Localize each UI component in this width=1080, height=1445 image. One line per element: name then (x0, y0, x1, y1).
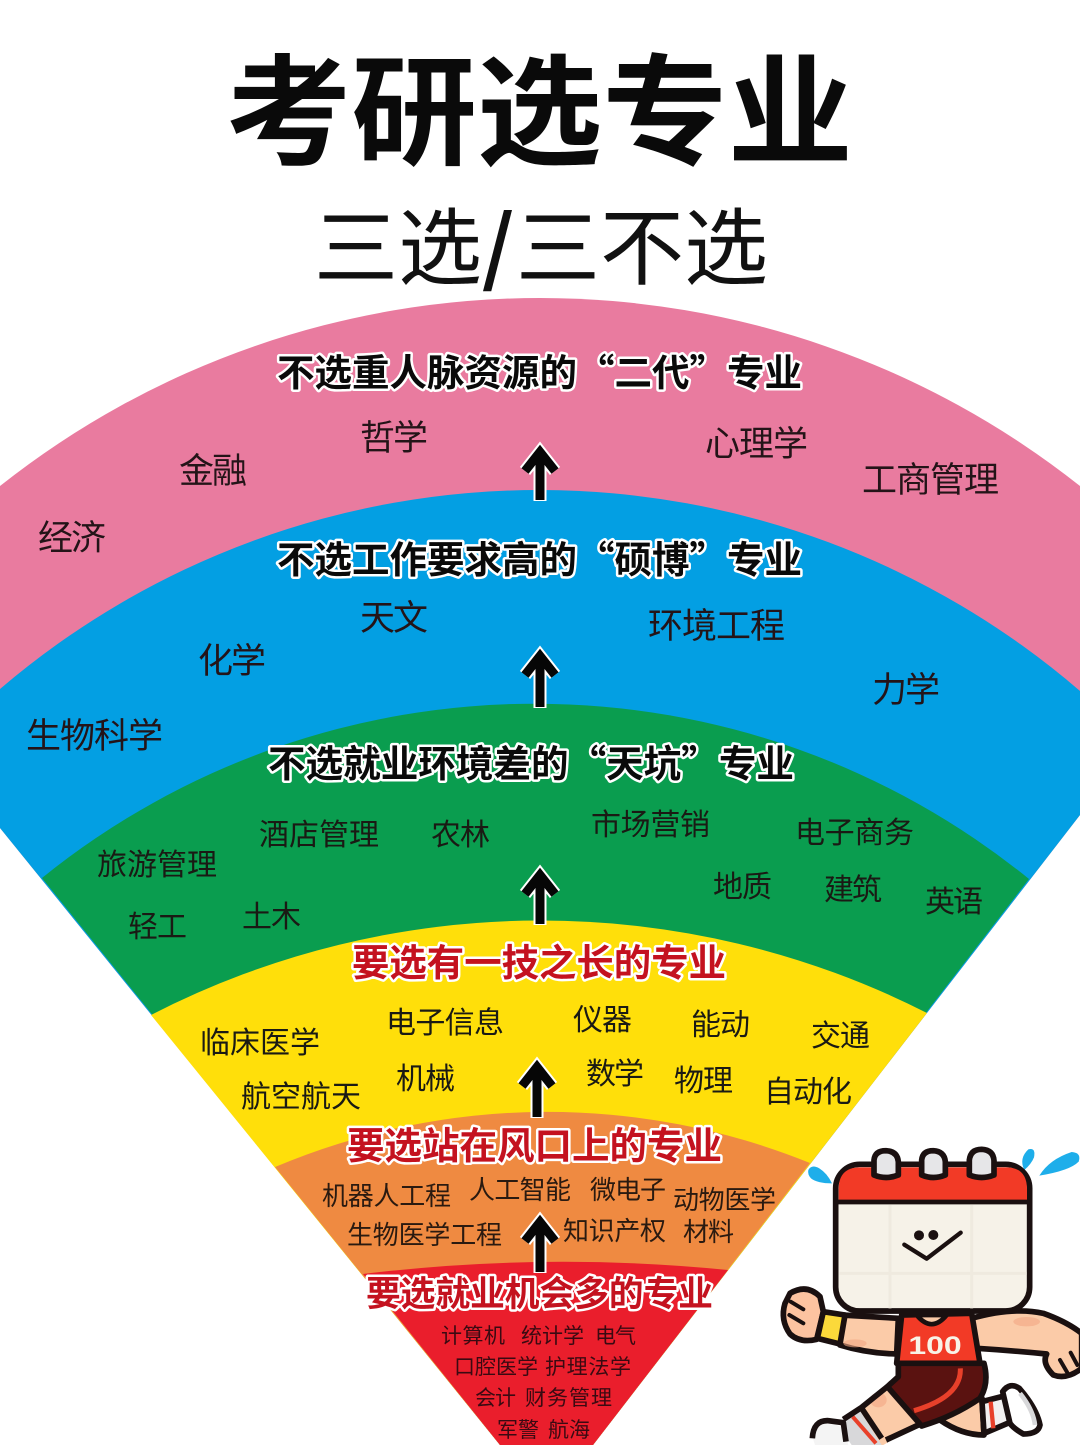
icon: smiling face (904, 1230, 961, 1259)
chart: major selection fan (0, 298, 1080, 1445)
majors: orange tier: 知识产权 (563, 1216, 666, 1246)
majors: pink tier: 哲学 (360, 419, 428, 458)
icon: front leg and shoe (812, 1387, 918, 1445)
icon: back leg and shoe (940, 1386, 1040, 1435)
subtitle: / (483, 191, 512, 314)
majors: orange tier: 动物医学 (673, 1185, 776, 1215)
panel: pink tier (38, 342, 999, 558)
majors: green tier: 市场营销 (591, 809, 710, 842)
majors: green tier: 地质 (713, 871, 772, 904)
majors: blue tier: 化学 (198, 642, 266, 681)
panel: green tier (97, 733, 983, 944)
majors: blue tier: 力学 (872, 671, 940, 710)
majors: pink tier: 心理学 (705, 425, 808, 464)
majors: pink tier: 经济 (38, 519, 106, 558)
icon: jersey (897, 1313, 980, 1363)
majors: blue tier: 生物科学 (26, 717, 163, 756)
majors: green tier: 土木 (242, 901, 301, 934)
majors: yellow tier: 仪器 (573, 1004, 632, 1037)
heading: pink tier: 不选重人脉资源的“二代”专业 (277, 342, 802, 397)
majors: yellow tier: 数学 (586, 1058, 644, 1091)
majors: red tier: 航海 (548, 1419, 590, 1442)
majors: orange tier: 生物医学工程 (347, 1220, 502, 1250)
icon: sweat drops (808, 1149, 1079, 1183)
majors: green tier (97, 809, 983, 944)
heading: blue tier: 不选工作要求高的“硕博”专业 (277, 529, 802, 584)
arrow: yellow to green (525, 875, 555, 925)
band: pink (0, 298, 1080, 1445)
icon: running calendar mascot (783, 1149, 1080, 1445)
panel: blue tier (26, 529, 940, 756)
band: orange (275, 1112, 810, 1445)
majors: orange tier: 机器人工程 (322, 1181, 451, 1211)
icon: calendar head (836, 1149, 1030, 1311)
majors: red tier: 口腔医学 (454, 1356, 538, 1379)
majors: green tier: 建筑 (824, 874, 882, 907)
majors: orange tier: 人工智能 (469, 1175, 571, 1205)
majors: pink tier (38, 419, 999, 558)
majors: yellow tier: 临床医学 (200, 1027, 320, 1060)
icon: shorts (887, 1363, 986, 1426)
majors: red tier: 统计学 (521, 1325, 584, 1348)
band: yellow (151, 921, 927, 1445)
icon: right arm and fist (972, 1311, 1080, 1376)
majors: yellow tier: 电子信息 (386, 1007, 504, 1040)
majors: green tier: 农林 (431, 819, 490, 852)
arrow: green to blue (525, 656, 555, 708)
majors: yellow tier: 航空航天 (241, 1081, 361, 1114)
majors: orange tier: 材料 (683, 1217, 734, 1247)
subtitle: 三不选 (516, 202, 768, 296)
majors: blue tier: 环境工程 (648, 607, 785, 646)
majors: green tier: 酒店管理 (259, 819, 379, 852)
majors: blue tier: 天文 (360, 599, 428, 638)
panel: orange tier (322, 1115, 776, 1250)
arrow: orange to yellow (522, 1067, 552, 1118)
band: red (363, 1262, 728, 1445)
majors: pink tier: 金融 (179, 452, 247, 491)
majors: yellow tier: 交通 (811, 1020, 870, 1053)
icon: jersey: 100 (908, 1333, 962, 1360)
panel: red tier (366, 1266, 713, 1442)
band: green (42, 704, 1029, 1445)
heading: yellow tier: 要选有一技之长的专业 (352, 932, 726, 987)
majors: yellow tier: 能动 (691, 1009, 750, 1042)
majors: red tier (441, 1325, 636, 1442)
majors: red tier: 电气 (595, 1325, 636, 1348)
majors: pink tier: 工商管理 (862, 461, 999, 500)
arrow: red to orange (525, 1222, 555, 1273)
title: 考研选专业 (226, 47, 853, 181)
majors: yellow tier: 自动化 (764, 1076, 852, 1109)
majors: green tier: 英语 (925, 886, 983, 919)
majors: yellow tier: 物理 (674, 1065, 733, 1098)
majors: yellow tier (200, 1004, 870, 1114)
majors: green tier: 旅游管理 (97, 849, 217, 882)
band: blue (0, 490, 1080, 1445)
heading: orange tier: 要选站在风口上的专业 (347, 1115, 722, 1170)
icon: calendar rings (874, 1149, 994, 1177)
majors: blue tier (26, 599, 940, 756)
majors: yellow tier: 机械 (396, 1063, 455, 1096)
majors: red tier: 计算机 (441, 1325, 505, 1348)
heading: green tier: 不选就业环境差的“天坑”专业 (268, 733, 794, 788)
majors: orange tier (322, 1175, 776, 1250)
majors: red tier: 军警 (497, 1419, 539, 1442)
arrow: blue to pink (525, 452, 555, 501)
icon: left arm and fist (783, 1289, 898, 1354)
heading: red tier: 要选就业机会多的专业 (366, 1266, 713, 1317)
subtitle: 三选 (314, 202, 482, 296)
panel: yellow tier (200, 932, 870, 1114)
majors: green tier: 电子商务 (795, 817, 914, 850)
majors: orange tier: 微电子 (590, 1175, 666, 1205)
majors: green tier: 轻工 (128, 911, 187, 944)
majors: red tier: 护理法学 (545, 1356, 631, 1379)
majors: red tier: 会计 (475, 1387, 516, 1410)
subtitle (314, 191, 768, 314)
majors: red tier: 财务管理 (525, 1387, 612, 1410)
